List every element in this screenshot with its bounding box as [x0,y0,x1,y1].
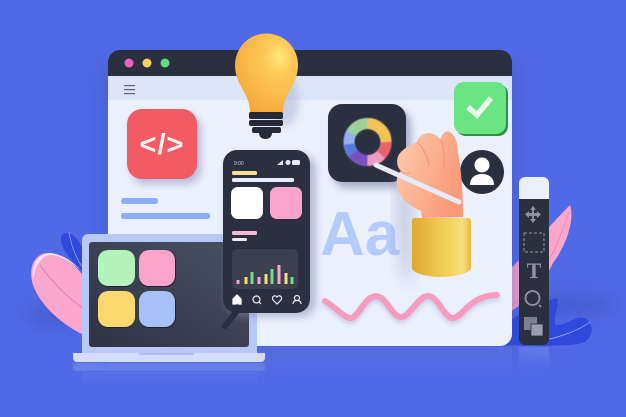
finger creases [401,139,444,173]
left leaves [31,232,88,335]
laptop base [73,353,265,362]
code tile [127,109,201,184]
code tile: </> [140,129,184,161]
move icon [525,206,541,223]
check tile [454,82,508,136]
pen [376,165,459,202]
hand [397,131,463,218]
nav icons [233,295,301,304]
pink leaf [510,205,571,312]
laptop [73,234,265,362]
pink card [270,187,302,219]
app tiles [98,250,176,328]
pink leaf [31,253,88,335]
pink squiggle [325,295,497,321]
color wheel tile [328,104,411,188]
hamburger menu [124,85,135,94]
status icons [277,160,300,165]
window body [108,76,512,346]
cursor [225,312,236,326]
sub bars [232,231,257,235]
text lines [121,198,210,219]
sub header [108,76,512,100]
blue leaf [61,233,88,272]
cuff [412,218,471,277]
traffic lights [124,58,170,68]
bulb base [249,112,283,139]
Aa type sample: Aa [320,200,400,269]
hand with pen [376,131,471,280]
layers icon [524,317,543,336]
laptop lid [82,234,257,353]
header bars [232,171,257,175]
right leaves [505,205,592,346]
blue leaf [505,298,592,346]
laptop screen [89,242,249,347]
zoom icon [526,291,541,307]
user avatar [460,150,504,194]
phone [223,150,316,317]
status time: 9:00 [234,161,244,167]
marquee icon [524,233,544,252]
reflection below window [73,347,549,390]
color wheel [349,124,386,161]
bar chart [232,249,298,289]
title bar [108,50,512,76]
toolbar [519,177,549,345]
laptop notch [139,353,194,355]
white card [231,187,263,219]
browser window [100,50,520,355]
bulb glass [235,34,298,112]
type icon: T [527,258,542,283]
toolbar cap [519,177,549,199]
light bulb [235,34,299,139]
ground shadows [26,295,615,325]
